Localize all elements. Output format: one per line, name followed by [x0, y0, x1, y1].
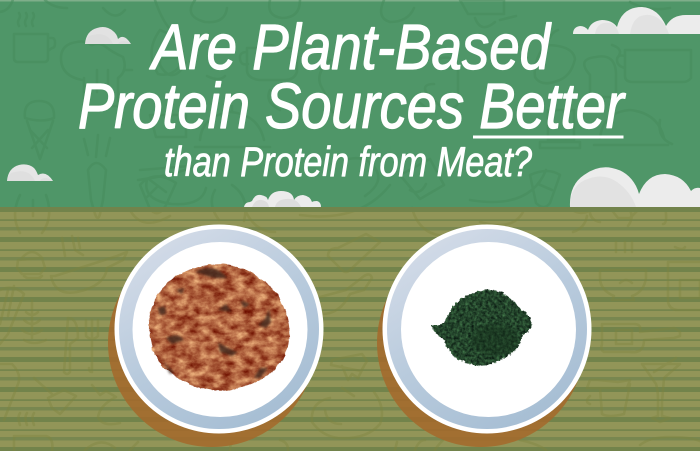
title line 1: Are Plant-Based [149, 11, 552, 83]
cloud: lower right [570, 167, 700, 207]
background: green header [0, 0, 700, 207]
title line 3: than Protein from Meat? [164, 138, 533, 185]
cloud: upper right [573, 7, 700, 34]
underline: Better [473, 136, 624, 138]
cloud: small upper left [85, 27, 131, 44]
cloud: small left [7, 164, 53, 181]
plate: spirulina powder [377, 224, 592, 447]
plate shadow [108, 239, 316, 447]
plate centre [132, 242, 308, 417]
food: plant-based patty [149, 264, 290, 391]
plate rim [114, 224, 324, 434]
plate ring [119, 229, 319, 429]
food: green powder [431, 290, 532, 366]
plate shadow [377, 239, 585, 447]
plate ring [387, 229, 587, 429]
background: striped table [0, 207, 700, 451]
background: doodle pattern on green [11, 0, 632, 2]
table edge shadow [0, 207, 700, 212]
plate rim [382, 224, 592, 434]
cloud: bottom centre [244, 191, 321, 207]
background: doodle pattern on table [0, 212, 700, 447]
plate: veggie patty [108, 224, 324, 447]
title [78, 11, 626, 185]
plate centre [401, 242, 576, 417]
